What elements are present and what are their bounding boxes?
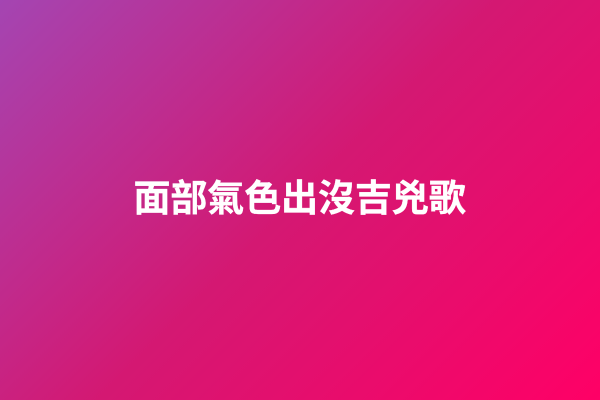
- title: 面部氣色出沒吉兇歌: [134, 178, 466, 219]
